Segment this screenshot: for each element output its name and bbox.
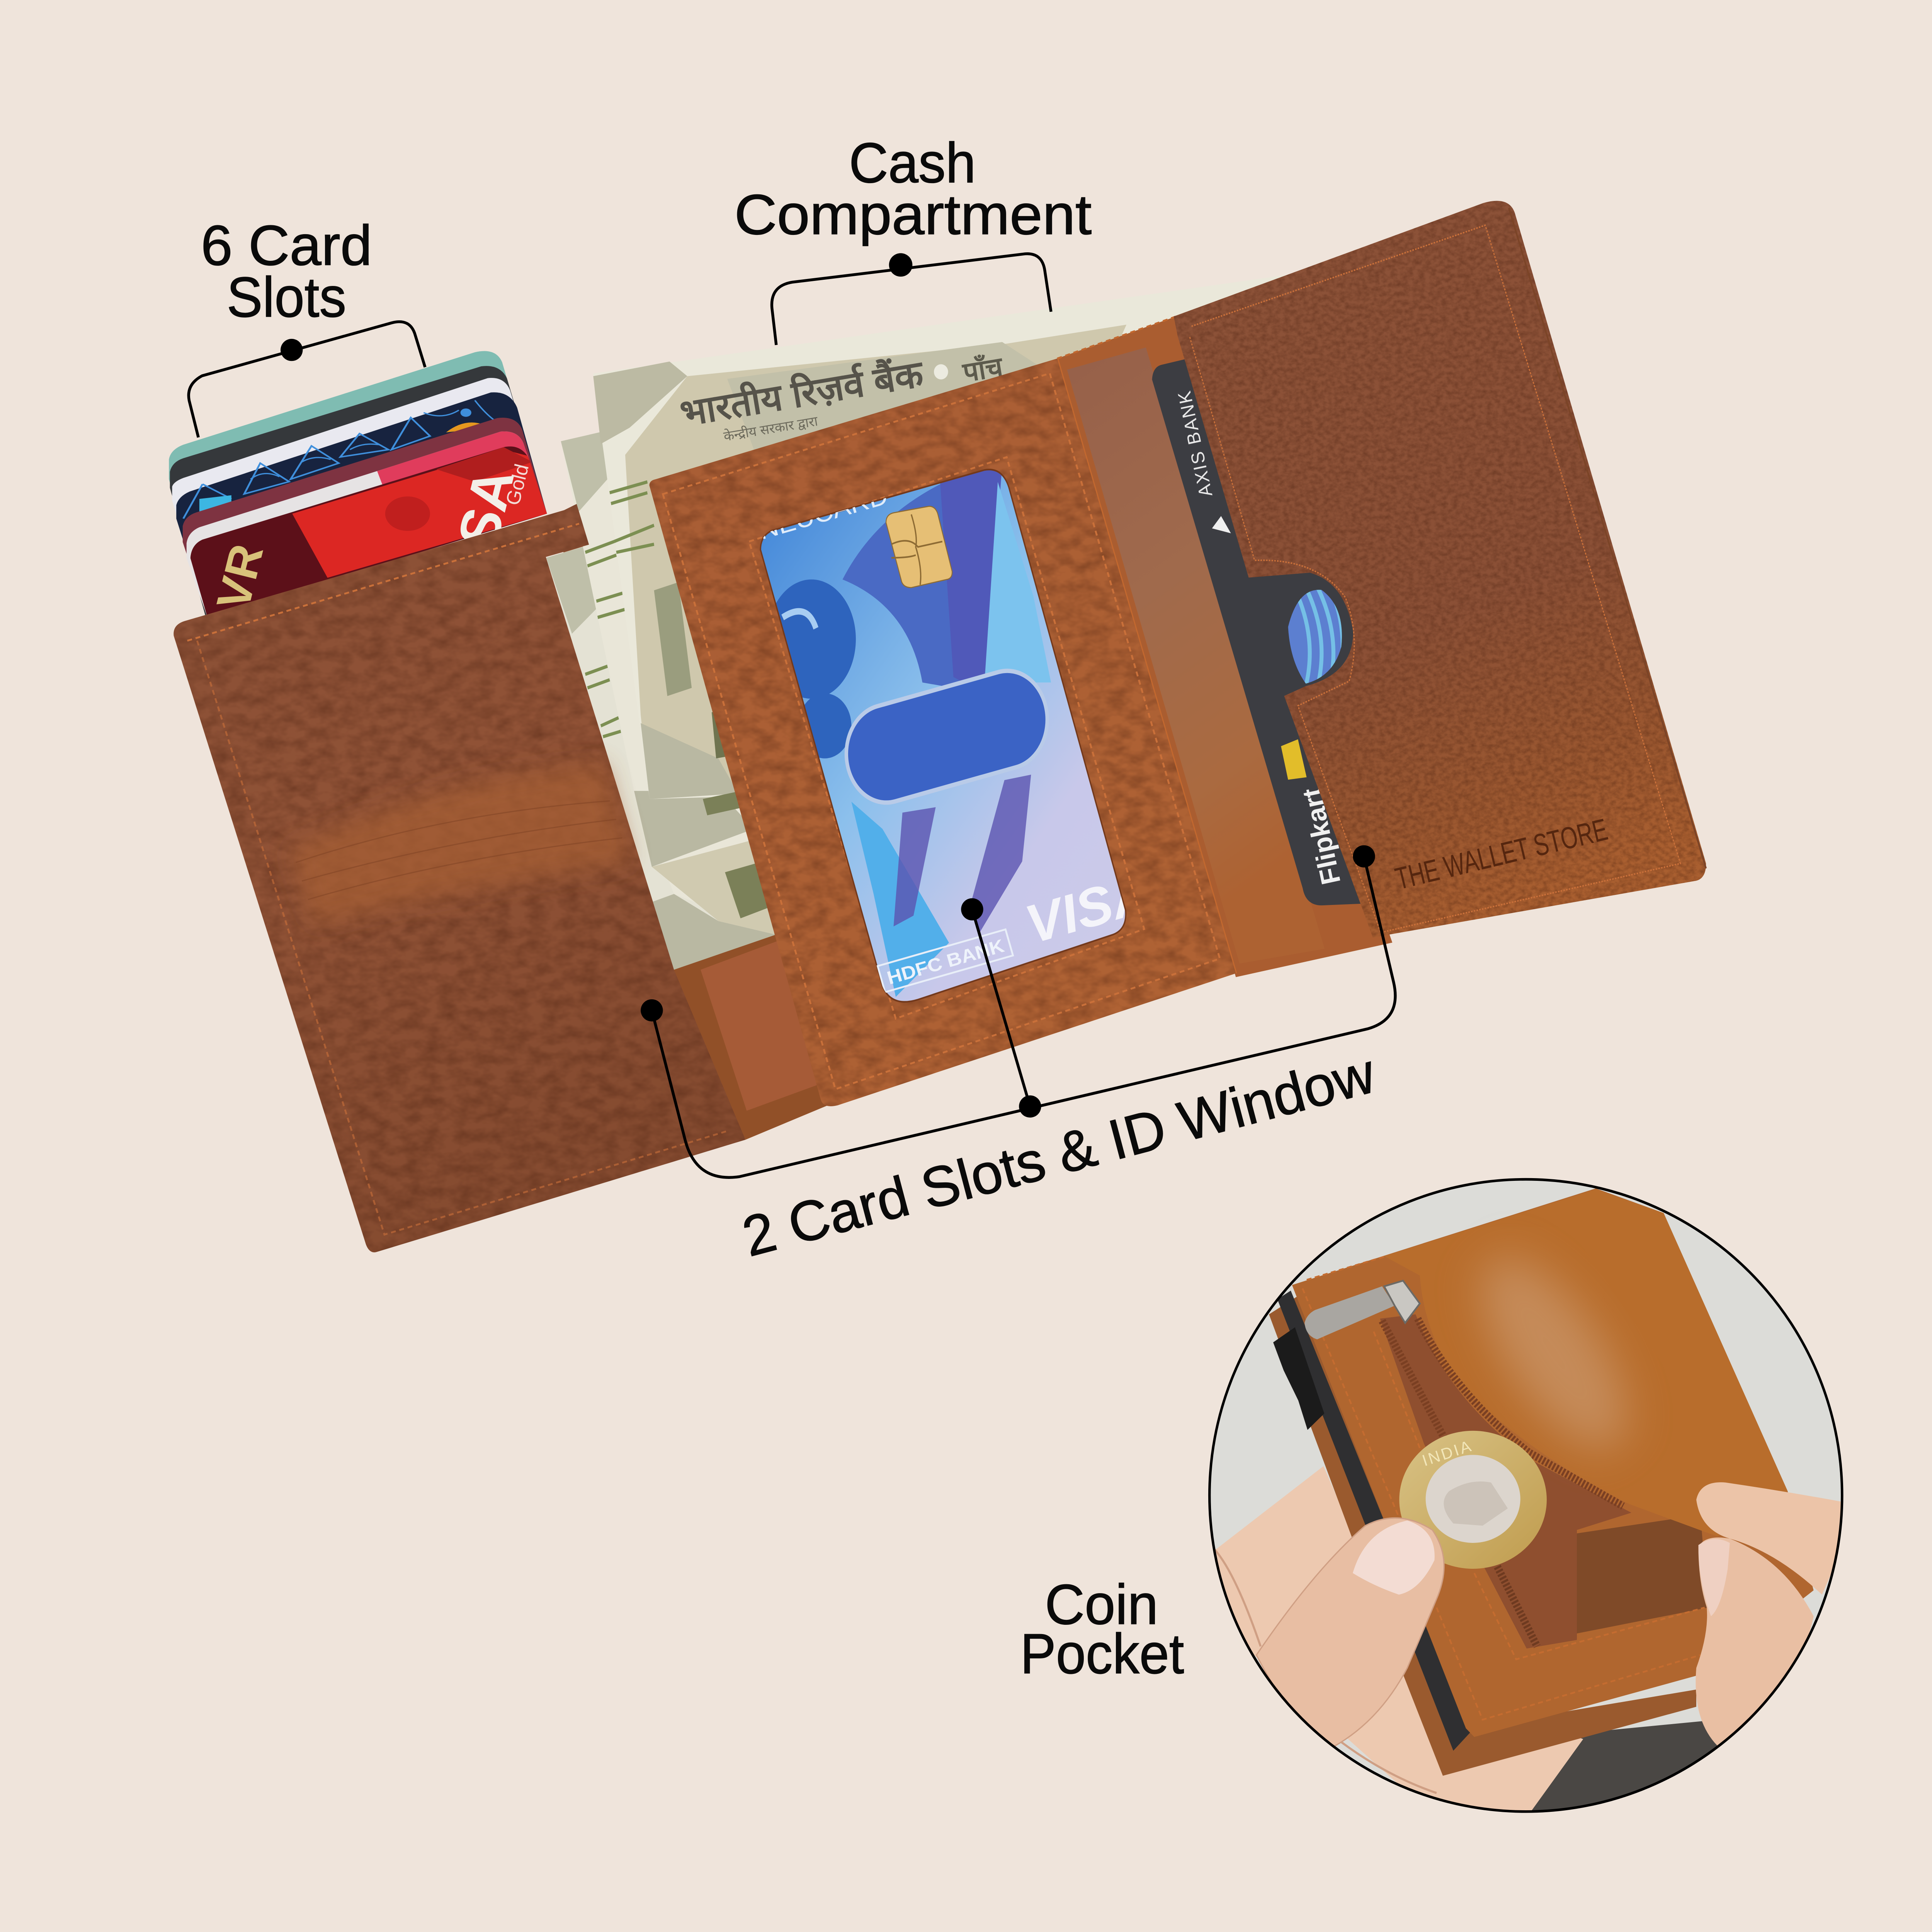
panel: blue card in ID window — [754, 460, 1135, 1008]
card text: hdfc bank — [878, 929, 1013, 992]
card text: neucard: NEUCARD — [755, 481, 891, 545]
thumbnail — [1353, 1520, 1435, 1595]
panel: stack of six cards — [169, 351, 549, 620]
dot: card slots — [281, 339, 303, 361]
icon: white triangle — [1212, 516, 1231, 533]
card text: VR: VR — [206, 539, 273, 615]
heading: 6 card slots: Slots — [227, 266, 346, 329]
dot: lower junction — [1019, 1095, 1041, 1117]
banknote text: value: पाँच — [960, 351, 1006, 388]
heading: coin pocket — [1020, 1573, 1184, 1685]
lower zipper teeth — [1497, 1566, 1537, 1646]
right thumb — [1696, 1537, 1814, 1746]
heading: coin pocket: Coin — [1045, 1573, 1158, 1636]
card text: axis bank: AXIS BANK — [1174, 388, 1217, 499]
upper pocket flap — [1384, 1189, 1787, 1536]
connector: card slots bracket — [189, 322, 425, 437]
dot: cash — [889, 253, 912, 277]
left palm and fingers — [1210, 1466, 1583, 1815]
heading: 2 card slots and id window: 2 Card Slots & ID Window — [736, 1041, 1382, 1269]
heading: cash compartment: Cash — [849, 131, 976, 195]
black card slider — [1277, 1291, 1470, 1751]
charcoal card — [170, 366, 547, 617]
middle banknote — [561, 432, 783, 936]
heading: 6 card slots — [201, 214, 372, 329]
fabric slot — [701, 940, 823, 1111]
panel: pocket fabric and lower strip — [674, 930, 828, 1140]
heading: cash compartment — [735, 131, 1092, 247]
card text: flipkart: Flipkart — [1296, 785, 1346, 887]
heading: coin pocket: Pocket — [1020, 1622, 1184, 1685]
dot: left slot — [641, 999, 663, 1021]
coin pocket interior — [1380, 1314, 1631, 1648]
gusset sheen — [1067, 347, 1325, 964]
heading: cash compartment: Compartment — [735, 183, 1092, 247]
pill shape — [838, 661, 1055, 812]
dark shadow area — [1529, 1720, 1717, 1815]
card text: visa: VISA — [1019, 862, 1157, 955]
maroon card — [183, 418, 547, 617]
white card — [172, 378, 547, 617]
panel: dark card behind right pocket — [1152, 356, 1381, 905]
inset backdrop — [1198, 1159, 1855, 1835]
card text: hdfc bank: HDFC BANK — [885, 935, 1007, 989]
dot: window — [961, 898, 983, 920]
connector: cash bracket — [772, 254, 1051, 345]
icon: coin — [1399, 1431, 1547, 1569]
icon: blue lens graphic — [1282, 583, 1349, 691]
banknote text: guarantee line: केन्द्रीय सरकार द्वारा — [723, 413, 819, 444]
red visa gold card — [187, 442, 549, 620]
heading: 6 card slots: 6 Card — [201, 214, 372, 277]
right index finger — [1696, 1482, 1843, 1595]
card text: SA: SA — [446, 462, 526, 554]
infographic canvas — [169, 141, 1844, 1813]
finger crease — [1214, 1549, 1437, 1793]
wallet front body — [1292, 1189, 1814, 1737]
thumb — [1257, 1518, 1444, 1750]
back layer of left pocket — [554, 504, 828, 1140]
icon: card chip — [886, 506, 952, 588]
leather grain band — [289, 764, 631, 924]
panel: coin pocket inset circle — [1198, 1159, 1855, 1835]
card text: Gold: Gold — [502, 462, 533, 507]
back banknote — [546, 546, 789, 970]
navy patterned card — [176, 392, 547, 617]
teal card — [169, 351, 547, 617]
callout connectors group — [189, 254, 1395, 1177]
flap sheen — [1454, 1234, 1654, 1472]
right thumbnail — [1698, 1539, 1730, 1616]
panel: centre ID window section — [649, 359, 1236, 1106]
panel: right pocket with notch — [1174, 201, 1706, 937]
callout dots group — [281, 253, 1375, 1117]
coin text: india: INDIA — [1420, 1436, 1475, 1469]
panel: banknotes — [546, 274, 1295, 970]
inner leather tab — [1577, 1515, 1708, 1633]
zipper teeth — [1382, 1319, 1623, 1506]
front stitching — [1303, 1194, 1705, 1720]
panel: left cover flap — [173, 504, 745, 1252]
icon: zipper puller — [1304, 1281, 1420, 1339]
white and crimson card — [187, 432, 547, 617]
banknote text: bank name: भारतीय रिज़र्व बैंक — [677, 352, 927, 434]
icon: yellow logo — [1281, 739, 1307, 780]
card text group — [755, 481, 1157, 992]
dot: right slot — [1353, 845, 1375, 867]
brand text: the wallet store: THE WALLET STORE — [1392, 812, 1611, 896]
connector: lower bracket — [652, 856, 1395, 1177]
wallet base layer — [1269, 1280, 1696, 1776]
panel: spine and gusset — [1057, 317, 1392, 977]
slider grip — [1273, 1327, 1324, 1430]
top banknote — [593, 274, 1295, 815]
inset border — [1209, 1179, 1842, 1811]
connector: window line — [972, 909, 1030, 1107]
